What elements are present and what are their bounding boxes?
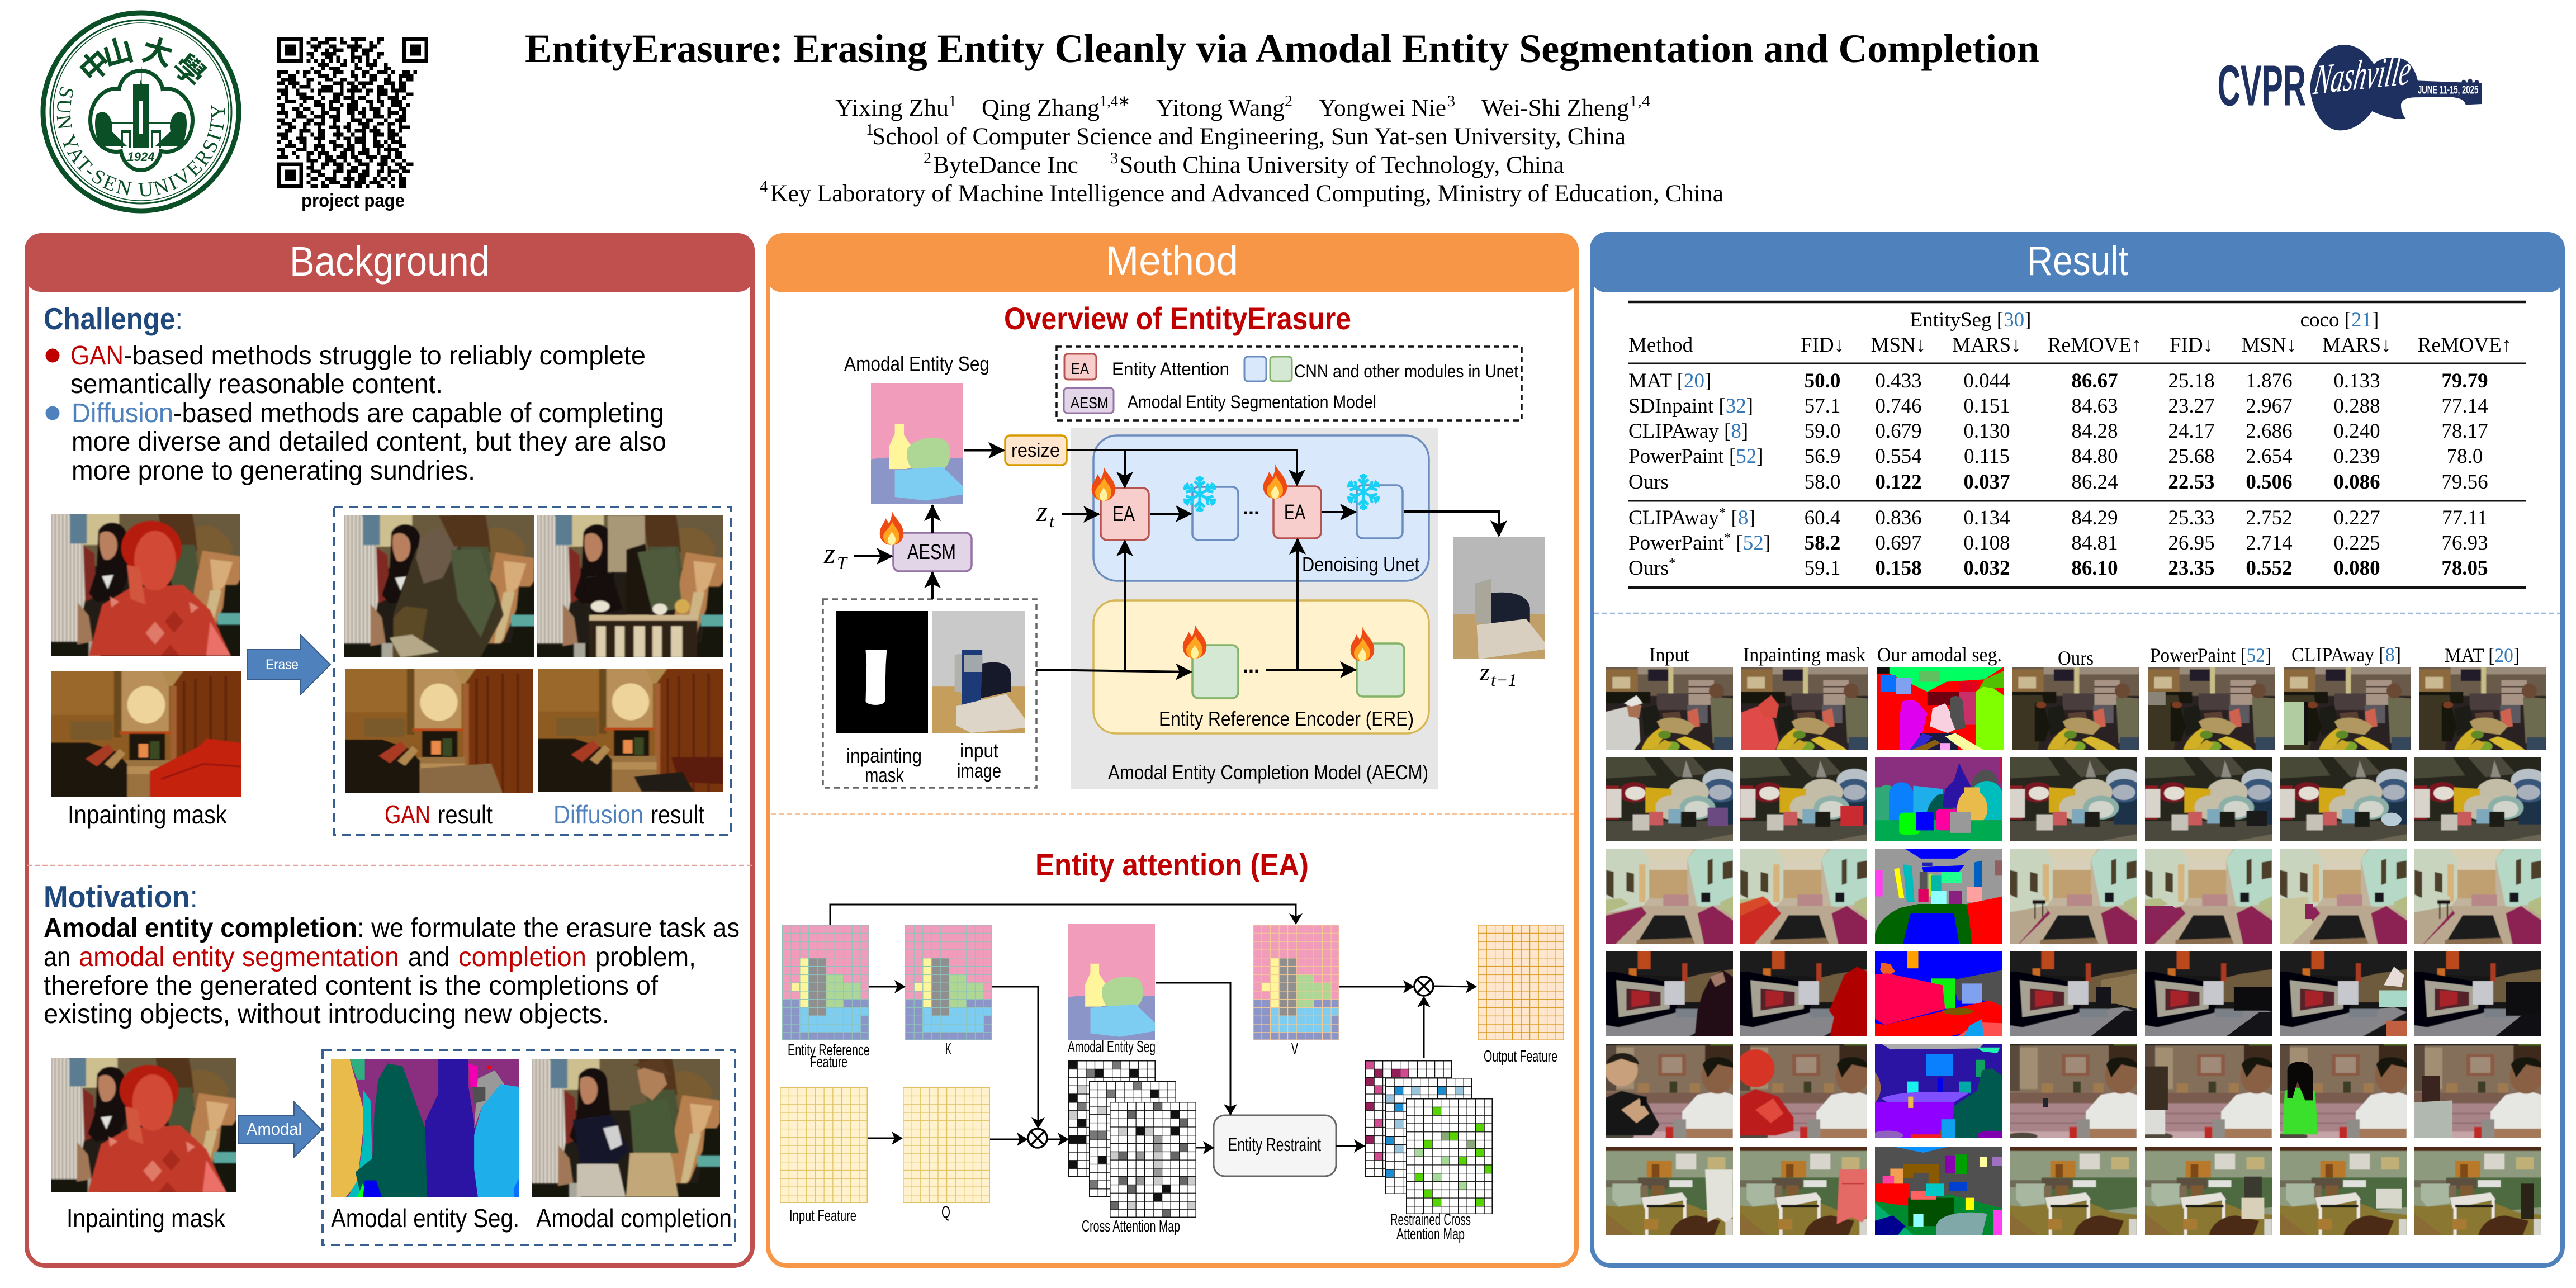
table values: 0.554 bbox=[1875, 445, 1922, 468]
label: amodal entity seg: Amodal Entity Seg bbox=[844, 352, 989, 375]
challenge bullets: more prone to generating sundries. bbox=[72, 456, 475, 486]
panel: background bbox=[25, 233, 755, 1266]
table column headers: Method bbox=[1628, 334, 1693, 357]
motivation text: completion bbox=[458, 943, 586, 972]
university logo: 學 bbox=[167, 48, 211, 93]
legend: Entity Attention bbox=[1112, 359, 1229, 379]
entity restraint box: Entity Restraint bbox=[1228, 1134, 1321, 1156]
latent labels: t−1 bbox=[1491, 670, 1517, 690]
motivation text: an bbox=[44, 943, 70, 972]
affiliations: 3 bbox=[1110, 150, 1118, 167]
motivation text: therefore the generated content is the completions of bbox=[44, 971, 659, 1001]
challenge bullets: GAN bbox=[70, 341, 124, 371]
EA blocks: EA bbox=[1284, 501, 1305, 524]
comparison row 6 bbox=[1600, 1142, 2547, 1239]
table values: 0.044 bbox=[1963, 370, 2010, 392]
EA blocks bbox=[1101, 486, 1321, 540]
table method names: PowerPaint bbox=[1628, 532, 1724, 555]
latent labels: t bbox=[1049, 511, 1055, 531]
captions: results: result bbox=[438, 800, 493, 829]
table values: 56.9 bbox=[1805, 445, 1840, 468]
table column headers: MARS↓ bbox=[1952, 334, 2021, 357]
output image bbox=[1453, 537, 1545, 659]
comparison column headers: Ours bbox=[2058, 647, 2094, 669]
labels: entity attention: Cross Attention Map bbox=[1082, 1218, 1180, 1235]
table values: 79.56 bbox=[2441, 471, 2488, 494]
table values: 84.28 bbox=[2071, 420, 2118, 443]
table values: 1.876 bbox=[2246, 370, 2293, 392]
table method names: MAT [20] bbox=[1628, 370, 1711, 392]
table values: 0.552 bbox=[2246, 557, 2293, 580]
table values: 84.29 bbox=[2071, 506, 2118, 529]
table method names: * bbox=[1669, 556, 1675, 571]
photo: masked party 2 bbox=[41, 1052, 245, 1199]
labels: entity attention: Attention Map bbox=[1396, 1225, 1465, 1243]
heading: method: Method bbox=[1106, 238, 1238, 284]
legend bbox=[1057, 347, 1522, 420]
motivation text: problem, bbox=[595, 943, 696, 972]
AECM background bbox=[1071, 428, 1438, 789]
photo: masked party bbox=[51, 514, 240, 656]
table values: 59.0 bbox=[1805, 420, 1840, 443]
table values: 78.0 bbox=[2447, 445, 2483, 468]
input dashed group bbox=[823, 599, 1036, 788]
table values: 0.679 bbox=[1875, 420, 1922, 443]
table values: 23.27 bbox=[2168, 395, 2215, 418]
table method names: * bbox=[1724, 531, 1731, 546]
captions: results: GAN bbox=[385, 800, 430, 829]
legend: AESM bbox=[1071, 394, 1109, 411]
table values: 78.17 bbox=[2441, 420, 2488, 443]
legend: Amodal Entity Segmentation Model bbox=[1128, 392, 1376, 412]
table values bbox=[1805, 370, 2488, 580]
table values: 22.53 bbox=[2168, 471, 2215, 494]
table method names: Ours bbox=[1628, 557, 1669, 580]
labels: entity attention: Amodal Entity Seg bbox=[1068, 1038, 1156, 1056]
university logo: 中 bbox=[73, 44, 118, 89]
panel: method bbox=[766, 233, 1579, 1266]
project QR code bbox=[277, 39, 427, 186]
comparison column headers: PowerPaint [52] bbox=[2150, 644, 2271, 666]
input image bbox=[932, 611, 1025, 733]
denoising unet bbox=[1093, 435, 1429, 581]
photo: diffusion party result bbox=[527, 508, 733, 665]
restrained cross attention maps bbox=[1365, 1060, 1493, 1214]
comparison row 3 bbox=[1600, 845, 2547, 948]
grid: Q bbox=[903, 1087, 990, 1203]
otimes nodes bbox=[1028, 977, 1433, 1148]
table values: 84.80 bbox=[2071, 445, 2118, 468]
input captions: image bbox=[957, 759, 1001, 782]
captions: results: result bbox=[651, 800, 704, 829]
university logo: 大 bbox=[139, 33, 176, 73]
table values: 0.836 bbox=[1875, 506, 1922, 529]
table values: 0.288 bbox=[2333, 395, 2380, 418]
table method names: 8] bbox=[1738, 506, 1755, 529]
affiliations: South China University of Technology, China bbox=[1120, 152, 1564, 178]
table values: 79.79 bbox=[2441, 370, 2488, 392]
latent labels: z bbox=[823, 538, 835, 570]
table method names: 52] bbox=[1743, 532, 1770, 555]
CVPR logo bbox=[2218, 45, 2482, 130]
comparison column headers: MAT [20] bbox=[2445, 644, 2520, 666]
table values: 0.086 bbox=[2333, 471, 2380, 494]
challenge bullets: -based methods struggle to reliably complete bbox=[124, 341, 646, 371]
university logo: SUN YAT-SEN UNIVERSITY bbox=[57, 87, 225, 197]
resize box bbox=[1005, 435, 1067, 465]
table values: 77.14 bbox=[2441, 395, 2488, 418]
table values: 0.032 bbox=[1963, 557, 2010, 580]
resize box: resize bbox=[1011, 440, 1060, 461]
affiliations: 1 bbox=[866, 121, 874, 139]
table values: 0.697 bbox=[1875, 532, 1922, 555]
labels in diagram bbox=[1108, 553, 1428, 784]
table values: 0.115 bbox=[1964, 445, 2010, 468]
university logo bbox=[40, 10, 242, 214]
grid: K bbox=[905, 925, 992, 1040]
CVPR logo: JUNE 11-15, 2025 bbox=[2418, 83, 2478, 96]
table values: 0.746 bbox=[1875, 395, 1922, 418]
input captions: input bbox=[960, 739, 998, 762]
cross attention maps bbox=[1068, 1060, 1196, 1218]
table values: 86.24 bbox=[2071, 471, 2118, 494]
table values: 60.4 bbox=[1805, 506, 1840, 529]
table method names: PowerPaint [52] bbox=[1628, 445, 1764, 468]
grid: entity reference feature bbox=[782, 925, 869, 1040]
authors: Yitong Wang bbox=[1156, 95, 1285, 121]
CVPR logo: Nashville bbox=[2311, 46, 2414, 103]
challenge heading: Challenge: bbox=[44, 301, 183, 336]
challenge bullets bbox=[46, 341, 666, 486]
motivation text: : we formulate the erasure task as bbox=[357, 913, 740, 943]
heading: result: Result bbox=[2027, 238, 2128, 284]
table column headers: FID↓ bbox=[2170, 334, 2213, 357]
input captions: inpainting bbox=[846, 744, 922, 767]
labels: entity attention: Entity Reference bbox=[788, 1041, 870, 1059]
table values: 2.967 bbox=[2246, 395, 2293, 418]
photo: masked room bbox=[51, 671, 241, 797]
captions: amodal: Amodal completion bbox=[536, 1204, 732, 1233]
latent labels bbox=[823, 496, 1517, 690]
labels: entity attention: Feature bbox=[810, 1053, 847, 1071]
photo: GAN party result bbox=[344, 515, 534, 657]
table values: 76.93 bbox=[2441, 532, 2488, 555]
authors: Qing Zhang bbox=[982, 95, 1100, 121]
university logo: 山 bbox=[99, 32, 137, 73]
affiliations: Key Laboratory of Machine Intelligence and Advanced Computing, Ministry of Education, China bbox=[770, 181, 1723, 207]
table method names: [ bbox=[1726, 506, 1738, 529]
authors: 1,4∗ bbox=[1100, 93, 1130, 110]
affiliations: School of Computer Science and Engineering, Sun Yat-sen University, China bbox=[872, 124, 1626, 150]
table values: 23.35 bbox=[2168, 557, 2215, 580]
motivation text bbox=[44, 913, 740, 1029]
comparison row 4 bbox=[1600, 947, 2547, 1040]
table values: 0.225 bbox=[2333, 532, 2380, 555]
table method names: SDInpaint [32] bbox=[1628, 395, 1753, 418]
table values: 25.33 bbox=[2168, 506, 2215, 529]
authors: 1 bbox=[949, 93, 956, 110]
flames bbox=[880, 464, 1374, 661]
table values: 59.1 bbox=[1805, 557, 1840, 580]
table values: 84.63 bbox=[2071, 395, 2118, 418]
table values: 0.433 bbox=[1875, 370, 1922, 392]
EA blocks: EA bbox=[1112, 503, 1135, 526]
table column headers: MSN↓ bbox=[2242, 334, 2296, 357]
latent labels: T bbox=[837, 553, 848, 573]
image: amodal seg bbox=[1068, 924, 1155, 1040]
table column headers: ReMOVE↑ bbox=[2418, 334, 2512, 357]
input captions: mask bbox=[865, 764, 905, 787]
affiliations: 4 bbox=[760, 178, 768, 196]
subheading: entity attention: Entity attention (EA) bbox=[1035, 847, 1309, 882]
challenge bullets: Diffusion bbox=[72, 399, 173, 428]
table values: 58.2 bbox=[1805, 532, 1840, 555]
latent labels: z bbox=[1036, 496, 1048, 528]
grid: output feature bbox=[1478, 925, 1564, 1040]
table group headers: EntitySeg [30] bbox=[1910, 309, 2031, 332]
mask image bbox=[836, 611, 928, 733]
challenge bullets: more diverse and detailed content, but they are also bbox=[72, 427, 666, 457]
QR caption: project page bbox=[301, 190, 405, 211]
labels in diagram: Amodal Entity Completion Model (AECM) bbox=[1108, 761, 1428, 784]
table method names: CLIPAway [8] bbox=[1628, 420, 1748, 443]
affiliations: ByteDance Inc bbox=[933, 152, 1078, 178]
comparison row 2 bbox=[1600, 752, 2547, 846]
authors: 3 bbox=[1447, 93, 1455, 110]
table values: 58.0 bbox=[1805, 471, 1840, 494]
entity restraint box bbox=[1214, 1115, 1336, 1176]
table values: 0.122 bbox=[1875, 471, 1922, 494]
comparison column headers: Input bbox=[1649, 643, 1689, 666]
title: EntityErasure: Erasing Entity Cleanly via Amodal Entity Segmentation and Completion bbox=[525, 26, 2039, 71]
comparison row 5 bbox=[1600, 1039, 2547, 1143]
table values: 0.151 bbox=[1963, 395, 2010, 418]
heading: background: Background bbox=[290, 238, 490, 285]
table values: 2.714 bbox=[2246, 532, 2293, 555]
table values: 57.1 bbox=[1805, 395, 1840, 418]
table values: 25.68 bbox=[2168, 445, 2215, 468]
table values: 86.67 bbox=[2071, 370, 2118, 392]
table values: 0.506 bbox=[2246, 471, 2293, 494]
dashed box: amodal results bbox=[323, 1050, 735, 1245]
labels: entity attention: Output Feature bbox=[1484, 1048, 1557, 1066]
frozen blocks bbox=[1192, 485, 1403, 540]
challenge bullets: -based methods are capable of completing bbox=[173, 399, 664, 428]
table values: 24.17 bbox=[2168, 420, 2215, 443]
table method names: [ bbox=[1731, 532, 1743, 555]
latent labels: z bbox=[1479, 657, 1490, 686]
labels: entity attention: K bbox=[945, 1040, 951, 1058]
seg image bbox=[871, 383, 963, 504]
comparison column headers: CLIPAway [8] bbox=[2291, 643, 2401, 666]
table method names: CLIPAway bbox=[1628, 506, 1719, 529]
labels in diagram: Denoising Unet bbox=[1302, 553, 1419, 576]
table values: 0.130 bbox=[1963, 420, 2010, 443]
affiliations bbox=[760, 121, 1723, 207]
table values: 50.0 bbox=[1805, 370, 1840, 392]
authors: 1,4 bbox=[1629, 93, 1650, 110]
labels in diagram: Entity Reference Encoder (ERE) bbox=[1159, 707, 1414, 730]
motivation text: Amodal entity completion bbox=[44, 913, 357, 943]
photo: amodal completion bbox=[522, 1053, 730, 1204]
affiliations: 2 bbox=[924, 150, 931, 167]
dots: ... bbox=[1243, 654, 1259, 677]
captions: results bbox=[385, 800, 704, 829]
arrows: overview bbox=[854, 450, 1499, 672]
table values: 0.240 bbox=[2333, 420, 2380, 443]
labels: entity attention: Restrained Cross bbox=[1390, 1211, 1471, 1229]
grid: V bbox=[1253, 925, 1339, 1040]
authors: Yixing Zhu bbox=[835, 95, 949, 121]
table values: 2.654 bbox=[2246, 445, 2293, 468]
metrics table bbox=[1628, 302, 2526, 588]
table values: 0.158 bbox=[1875, 557, 1922, 580]
table column headers: ReMOVE↑ bbox=[2048, 334, 2142, 357]
table column headers: MARS↓ bbox=[2322, 334, 2392, 357]
table column headers: MSN↓ bbox=[1871, 334, 1926, 357]
authors: Yongwei Nie bbox=[1319, 95, 1446, 121]
amodal seg picture bbox=[331, 1059, 519, 1197]
authors: Wei-Shi Zheng bbox=[1481, 95, 1629, 121]
table group headers: coco [21] bbox=[2300, 309, 2379, 332]
labels: entity attention: Input Feature bbox=[789, 1207, 856, 1225]
input captions bbox=[846, 739, 1001, 787]
table values: 2.686 bbox=[2246, 420, 2293, 443]
table values: 0.227 bbox=[2333, 506, 2380, 529]
table values: 78.05 bbox=[2441, 557, 2488, 580]
labels: entity attention: V bbox=[1291, 1040, 1298, 1058]
legend: EA bbox=[1071, 360, 1089, 377]
table values: 25.18 bbox=[2168, 370, 2215, 392]
legend: CNN and other modules in Unet bbox=[1294, 361, 1518, 381]
table values: 84.81 bbox=[2071, 532, 2118, 555]
comparison row 1 bbox=[1600, 663, 2552, 754]
photo: diffusion room result bbox=[528, 662, 733, 798]
arrow: amodal bbox=[239, 1102, 321, 1157]
motivation heading: Motivation: bbox=[44, 879, 198, 914]
snowflakes bbox=[1182, 474, 1381, 512]
table values: 0.134 bbox=[1963, 506, 2010, 529]
dots bbox=[1243, 496, 1259, 677]
table method names: * bbox=[1719, 505, 1726, 520]
arrow: erase bbox=[248, 634, 330, 695]
arrow: erase: Erase bbox=[266, 657, 299, 673]
authors: 2 bbox=[1285, 93, 1292, 110]
captions: results: Diffusion bbox=[553, 800, 643, 829]
arrows: entity attention bbox=[830, 905, 1476, 1148]
comparison column headers bbox=[1649, 643, 2520, 669]
table column headers bbox=[1628, 334, 2512, 357]
captions: amodal bbox=[331, 1204, 732, 1233]
arrow: amodal: Amodal bbox=[247, 1119, 302, 1139]
table group headers bbox=[1910, 309, 2379, 332]
panel: result bbox=[1590, 232, 2565, 1266]
caption: inpainting mask: Inpainting mask bbox=[68, 800, 228, 829]
dots: ... bbox=[1243, 496, 1259, 519]
grid: input feature bbox=[780, 1087, 868, 1203]
table values: 26.95 bbox=[2168, 532, 2215, 555]
comparison column headers: Our amodal seg. bbox=[1877, 643, 2002, 666]
table values: 0.080 bbox=[2333, 557, 2380, 580]
labels: entity attention: Q bbox=[941, 1204, 950, 1221]
table values: 0.037 bbox=[1963, 471, 2010, 494]
authors bbox=[835, 93, 1650, 121]
reference encoder bbox=[1093, 600, 1429, 733]
labels: entity attention bbox=[788, 1038, 1557, 1243]
challenge bullets: semantically reasonable content. bbox=[70, 370, 443, 399]
table method names: Ours bbox=[1628, 471, 1669, 494]
table values: 0.133 bbox=[2333, 370, 2380, 392]
captions: amodal: Amodal entity Seg. bbox=[331, 1204, 519, 1233]
motivation text: existing objects, without introducing new objects. bbox=[44, 1000, 609, 1029]
photo: GAN room result bbox=[335, 662, 542, 799]
table values: 2.752 bbox=[2246, 506, 2293, 529]
table column headers: FID↓ bbox=[1801, 334, 1844, 357]
dashed box: erase results bbox=[334, 507, 733, 835]
table values: 0.108 bbox=[1963, 532, 2010, 555]
encoder blocks bbox=[1192, 643, 1404, 698]
caption: inpainting mask 2: Inpainting mask bbox=[67, 1204, 226, 1233]
AESM block: AESM bbox=[907, 541, 956, 564]
CVPR logo: CVPR bbox=[2218, 53, 2306, 117]
motivation text: amodal entity segmentation bbox=[79, 943, 399, 972]
motivation text: and bbox=[408, 943, 449, 972]
table values: 86.10 bbox=[2071, 557, 2118, 580]
comparison column headers: Inpainting mask bbox=[1743, 643, 1865, 666]
university logo: 1924 bbox=[127, 150, 154, 164]
subheading: overview: Overview of EntityErasure bbox=[1004, 301, 1351, 336]
AESM block bbox=[893, 533, 972, 571]
table values: 77.11 bbox=[2442, 506, 2488, 529]
table values: 0.239 bbox=[2333, 445, 2380, 468]
table method names bbox=[1628, 370, 1770, 580]
